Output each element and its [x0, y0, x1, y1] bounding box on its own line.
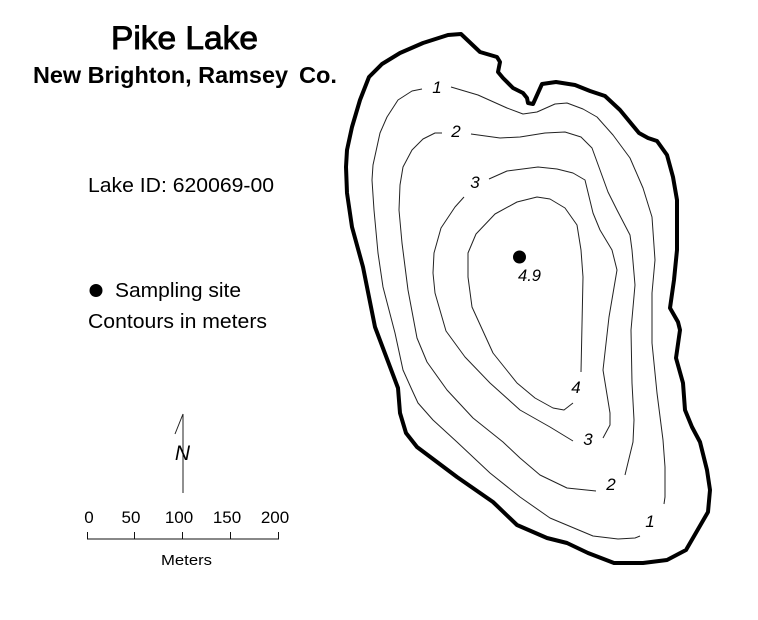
scale bar	[84, 508, 289, 569]
scale bar: 200	[261, 508, 289, 527]
contour labels: 1	[645, 512, 655, 531]
contour labels: 3	[470, 173, 480, 192]
contour labels: 2	[450, 122, 461, 141]
subtitle: location: Co.	[299, 62, 337, 88]
contour 3 m, east arc	[489, 167, 617, 438]
scale bar: 150	[213, 508, 241, 527]
contour 1 m	[372, 89, 640, 539]
scale bar: 0	[84, 508, 94, 527]
subtitle: location: New Brighton, Ramsey	[33, 62, 288, 88]
contour labels	[432, 78, 655, 531]
contour labels: 2	[605, 475, 616, 494]
contour 2 m, east arc	[471, 132, 635, 475]
scale bar: 50	[122, 508, 140, 527]
contour 4 m	[468, 197, 583, 410]
contour 3 m	[433, 197, 573, 441]
contour 2 m	[399, 133, 596, 491]
max depth label: 4.9	[518, 266, 542, 285]
sampling site marker	[513, 250, 526, 264]
lake shoreline	[346, 34, 710, 563]
scale bar: 100	[165, 508, 193, 527]
lake id: Lake ID: 620069-00	[88, 175, 274, 197]
legend: sampling site: Sampling site	[115, 280, 241, 302]
contour labels: 3	[583, 430, 593, 449]
north arrow: N	[175, 442, 191, 465]
contour labels: 4	[571, 378, 581, 397]
scale bar: Meters	[161, 552, 212, 569]
contour 1 m, east arc	[451, 87, 665, 504]
title: Pike Lake	[111, 20, 258, 56]
legend: contours note: Contours in meters	[88, 311, 267, 333]
north arrow	[175, 414, 191, 493]
contour labels: 1	[432, 78, 442, 97]
lake map	[346, 34, 710, 563]
